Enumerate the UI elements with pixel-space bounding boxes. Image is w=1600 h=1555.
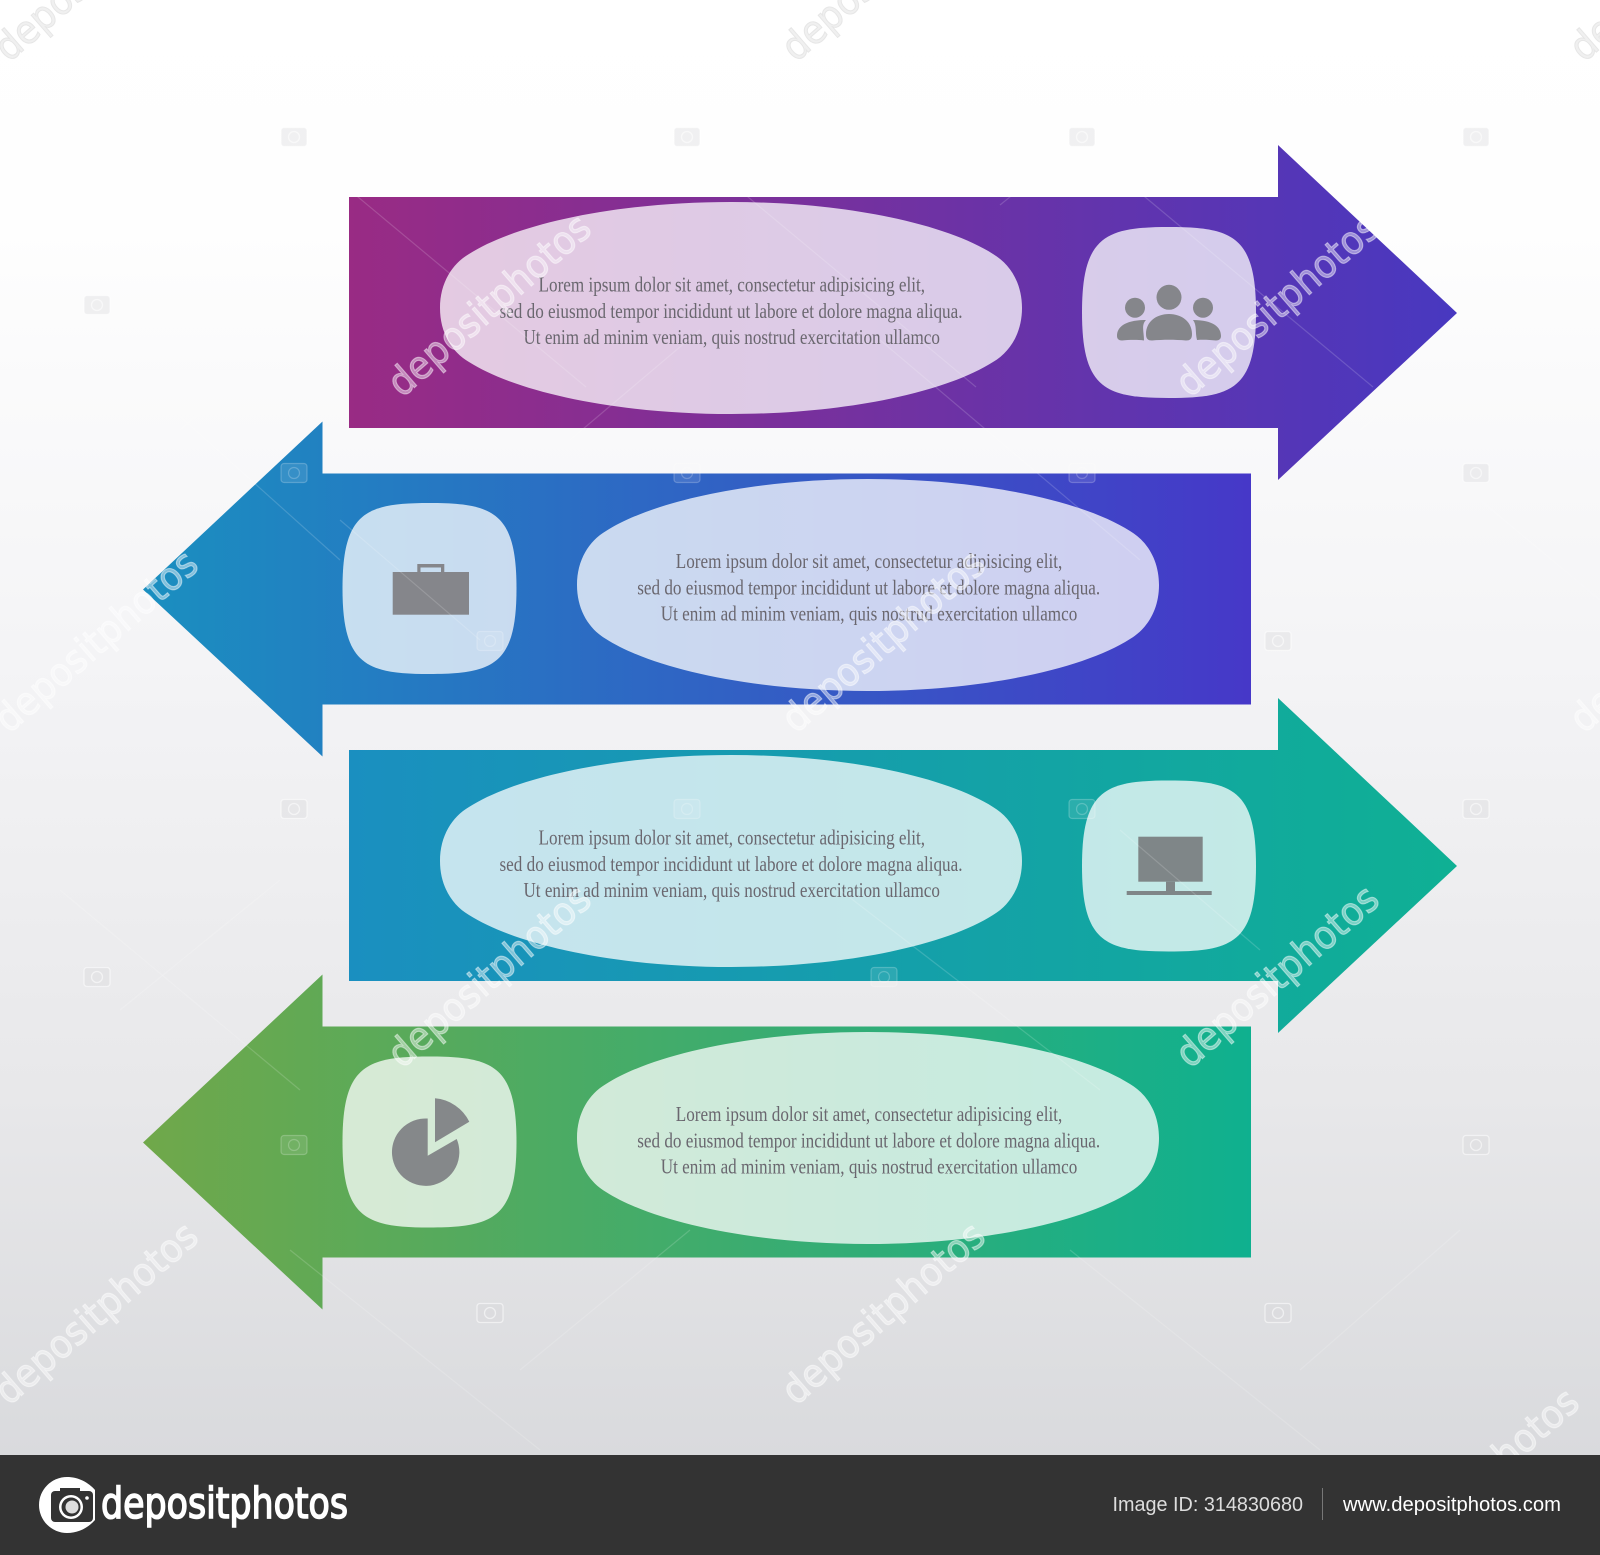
text block 3: Ut enim ad minim veniam, quis nostrud exercitation ullamco [523,878,940,902]
icon badge 1 [1082,227,1256,398]
watermark: depositphotos text tiles: depositphotos [773,1213,994,1414]
watermark: depositphotos text tiles: depositphotos [773,541,994,742]
text bubble 2 [577,479,1159,691]
text block 3: Lorem ipsum dolor sit amet, consectetur adipisicing elit, [539,826,925,850]
icon: people [1117,285,1221,340]
text block 1 [500,272,962,349]
arrow row 1: purple, pointing right [349,145,1457,480]
text block 3: sed do eiusmod tempor incididunt ut labore et dolore magna aliqua. [500,852,962,876]
arrow row 4: green, pointing left [143,974,1251,1310]
footer bar [0,1455,1600,1555]
icon badge 2 [342,503,516,674]
footer logo icon: camera [39,1477,95,1533]
icon badge 3 [1082,780,1256,952]
text block 4: Lorem ipsum dolor sit amet, consectetur adipisicing elit, [676,1102,1062,1126]
text block 1: Lorem ipsum dolor sit amet, consectetur adipisicing elit, [539,272,925,296]
text block 3 [500,826,962,902]
icon: monitor [1127,837,1212,895]
text block 2 [637,549,1100,626]
footer logo wordmark: depositphotos [101,1479,348,1529]
website url: www.depositphotos.com [1342,1494,1561,1516]
icon badge 4 [342,1056,516,1228]
text block 2: sed do eiusmod tempor incididunt ut labore et dolore magna aliqua. [637,575,1100,599]
watermark: depositphotos text tiles: depositphotos [379,876,600,1077]
icon: pie chart [392,1098,469,1186]
watermark: depositphotos text tiles: depositphotos [1167,205,1388,406]
watermark: depositphotos text tiles: depositphotos [1167,876,1388,1077]
text bubble 1 [440,202,1022,414]
arrow shape 3 [349,698,1457,1033]
text block 4: sed do eiusmod tempor incididunt ut labore et dolore magna aliqua. [637,1128,1100,1152]
watermark: small camera marks on background [84,128,1489,1322]
arrow shape 1 [349,145,1457,480]
text block 4: Ut enim ad minim veniam, quis nostrud exercitation ullamco [661,1154,1077,1178]
text block 1: Ut enim ad minim veniam, quis nostrud exercitation ullamco [523,325,940,349]
arrow shape 2 [143,422,1251,756]
text block 2: Lorem ipsum dolor sit amet, consectetur adipisicing elit, [676,549,1062,573]
image id: Image ID: 314830680 [1112,1494,1303,1516]
text block 2: Ut enim ad minim veniam, quis nostrud exercitation ullamco [661,602,1077,626]
arrow shape 4 [143,974,1251,1310]
watermark: small camera marks over arrows [281,464,1095,1154]
icon: briefcase [393,564,469,615]
text block 1: sed do eiusmod tempor incididunt ut labore et dolore magna aliqua. [500,299,962,323]
text bubble 4 [577,1032,1159,1244]
arrow row 3: teal, pointing right [349,698,1457,1033]
text bubble 3 [440,755,1022,967]
text block 4 [637,1102,1100,1178]
watermark: depositphotos text tiles: depositphotos [379,205,600,406]
arrow row 2: blue, pointing left [143,422,1251,756]
